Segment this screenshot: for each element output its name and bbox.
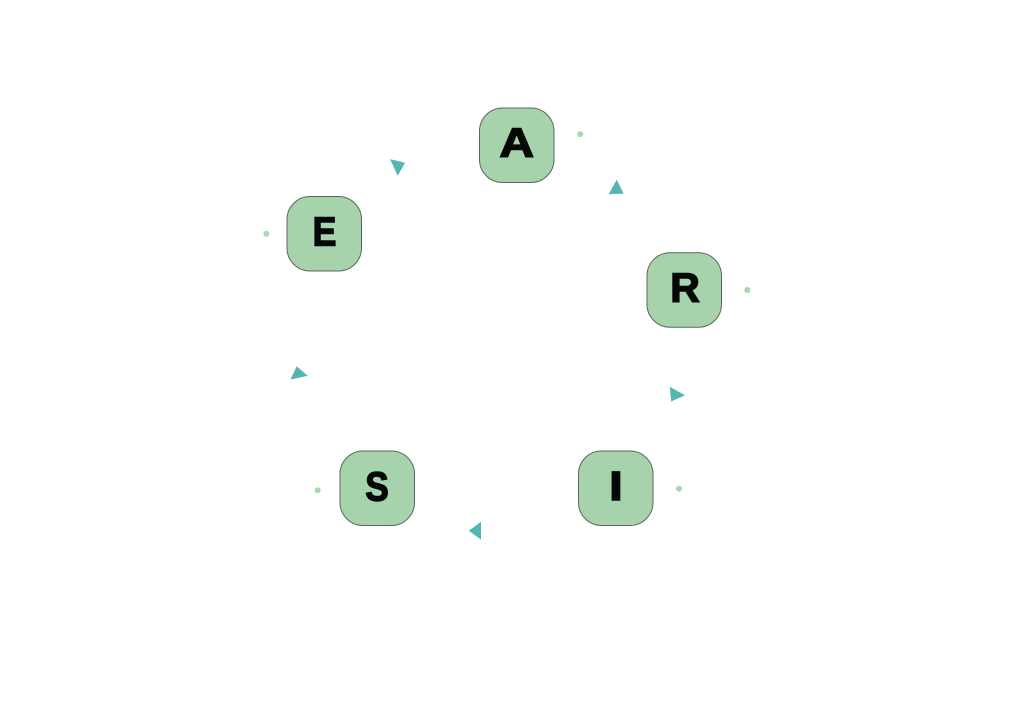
dot: I label marker bbox=[676, 486, 682, 492]
arrow: E to A bbox=[390, 159, 405, 176]
dot: S label marker bbox=[315, 487, 321, 493]
node: R bbox=[647, 253, 722, 327]
arrow: S to E bbox=[290, 366, 308, 380]
arrow: R to I bbox=[670, 387, 685, 402]
node: A bbox=[480, 108, 554, 182]
node: A: A bbox=[499, 121, 534, 166]
node: E: E bbox=[313, 209, 336, 255]
node: S bbox=[340, 451, 414, 526]
node: I: I bbox=[609, 463, 623, 509]
dot: E label marker bbox=[263, 231, 269, 237]
node: S: S bbox=[365, 464, 389, 510]
node: E bbox=[287, 196, 362, 271]
dot: R label marker bbox=[744, 287, 750, 293]
dot: A label marker bbox=[577, 131, 583, 137]
node: I bbox=[578, 451, 653, 526]
arrow: I to S bbox=[469, 522, 481, 540]
node: R: R bbox=[670, 265, 700, 311]
arrow: A to R bbox=[609, 180, 624, 194]
